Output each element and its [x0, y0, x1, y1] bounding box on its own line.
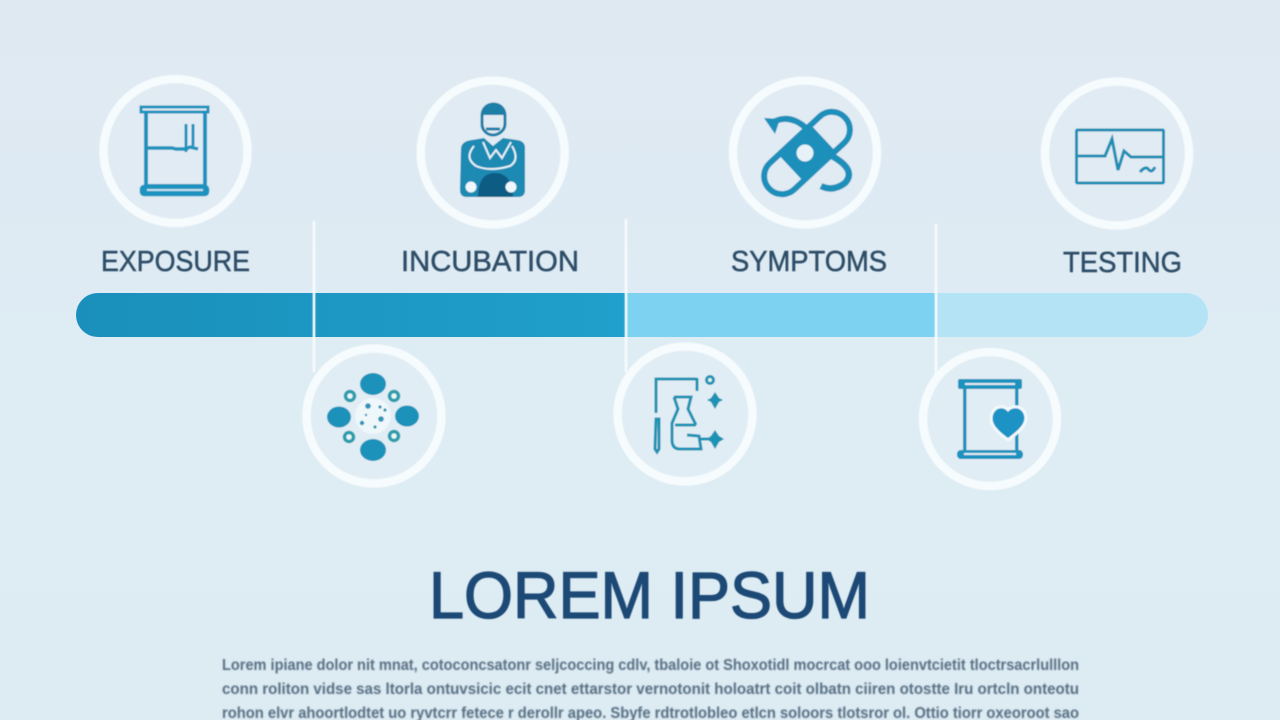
stage: incubation — [401, 80, 579, 278]
connector lines — [314, 219, 936, 376]
stage: testing — [1045, 82, 1189, 279]
icon: cell cluster — [327, 373, 419, 461]
icon ring: flask — [618, 346, 752, 482]
icon: window frame — [141, 107, 208, 195]
icon: bandage with arrows — [757, 104, 857, 202]
icon group: scroll with heart — [923, 352, 1057, 486]
icon ring: scroll with heart — [923, 352, 1057, 486]
timeline progress bar — [76, 293, 1208, 337]
icon: lab flask with sparkles — [655, 376, 724, 452]
icon ring: symptoms — [733, 80, 877, 224]
icon ring: cells — [306, 348, 442, 484]
body text — [222, 657, 1079, 720]
label: symptoms: SYMPTOMS — [731, 246, 887, 278]
label: incubation: INCUBATION — [401, 246, 579, 278]
icon group: flask — [618, 346, 752, 482]
icon ring: incubation — [421, 80, 565, 224]
icon: heart monitor — [1076, 130, 1164, 183]
icon ring: exposure — [104, 79, 248, 223]
label: testing: TESTING — [1063, 247, 1182, 279]
stage: symptoms — [731, 80, 887, 278]
stage: exposure — [101, 79, 250, 278]
icon ring: testing — [1045, 82, 1189, 226]
label: exposure: EXPOSURE — [101, 246, 250, 278]
icon: scroll and heart — [957, 379, 1024, 459]
body text: Lorem ipiane dolor nit mnat, cotoconcsatonr seljcoccing cdlv, tbaloie ot Shoxotidl mocrcat ooo loienvtcietit tloctrsacrlulllon — [222, 657, 1079, 674]
icon group: cells — [306, 348, 442, 484]
title: LOREM IPSUM — [429, 558, 870, 632]
icon: medical worker — [460, 104, 525, 197]
body text: conn roliton vidse sas ltorla ontuvsicic ecit cnet ettarstor vernotonit holoatrt coit olbatn ciiren otostte Iru ortcln onteotu — [222, 681, 1079, 698]
